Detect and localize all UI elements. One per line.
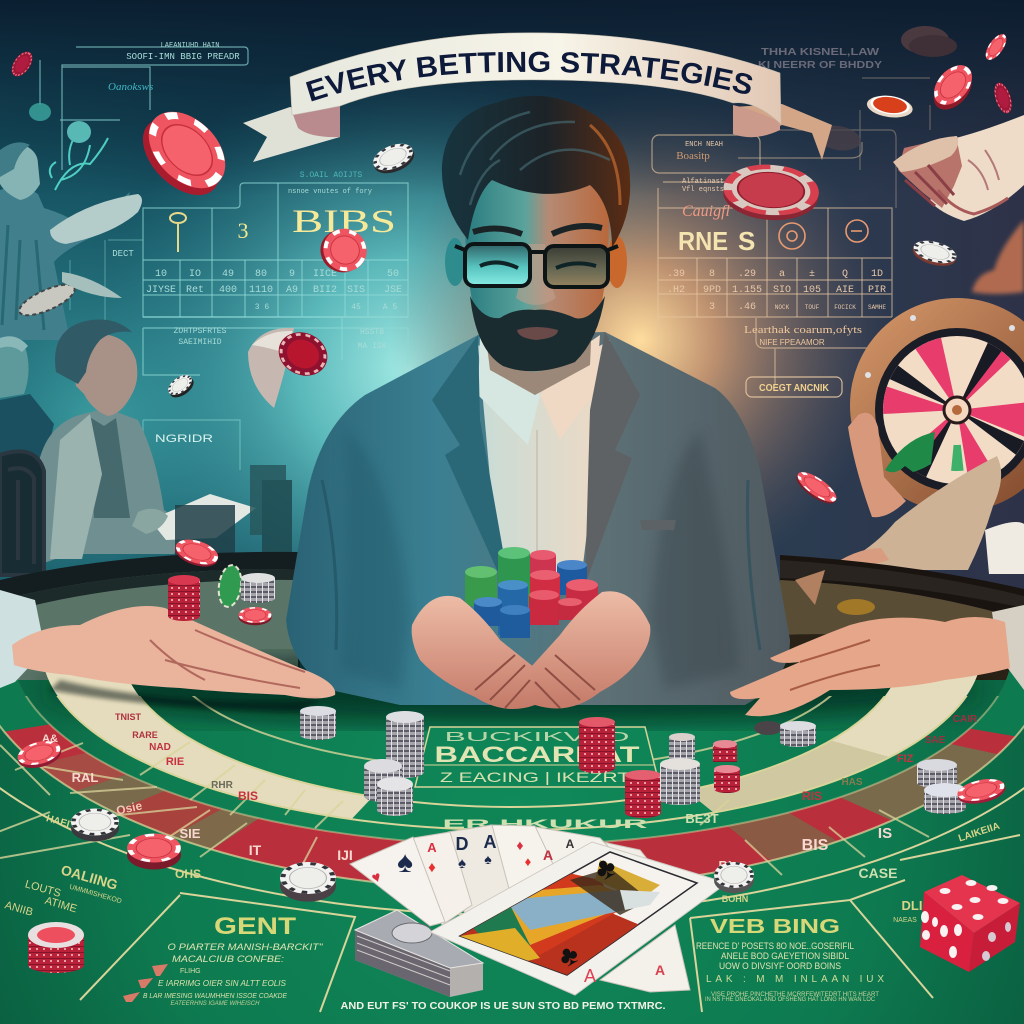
felt gold lines [0,696,1024,1012]
winged chip [248,324,335,408]
right chart text: THHA KISNEL,LAW [761,47,880,58]
card pips: ♠ [569,857,575,869]
right chart text: SAMHE [868,304,886,311]
icons in right chart [779,220,868,249]
left chart text [108,42,402,445]
left chart text: 1110 [249,285,273,296]
right chart text: .46 [738,302,756,313]
left chart text: JIYSE [146,285,176,296]
strategy panel: GENT: GENT [214,913,296,940]
strategy panel: VEB BING: ANELE BOD GAEYETION SIBIDL [721,951,849,961]
left chart text: LAEANIUHD HAIN [161,42,219,50]
right chart text: Alfatinast [682,178,724,186]
betting band labels: SIE [180,826,201,841]
card pips: A [543,847,553,863]
right chart text: NOCK [775,304,790,311]
card pips: ♦ [525,854,532,869]
right chart text: 8 [709,269,715,280]
betting band labels [42,712,1001,904]
right chart text: TOUF [805,304,820,311]
strategy panel: GENT: FLIHG [180,968,201,975]
icon: glowing key [170,213,186,252]
roulette wheel [850,298,1024,512]
left chart text: A 5 [383,303,397,312]
right chart text: Cauigfl [682,203,731,220]
left chart text: IO [189,269,201,280]
person lapels [432,332,676,590]
chips in person's hands [465,547,598,638]
person neck [485,320,592,395]
left chart text: NGRIDR [155,433,213,445]
betting band labels: IJI [337,847,353,863]
Baccarat center box [415,727,660,831]
betting band labels: RIS [802,789,822,803]
strategy panel: VEB BING: IN NS FHE DNEOKAL AND OFSHENG HAT LONG HN WAN LOC [705,997,876,1003]
betting band labels: RAL [72,770,98,785]
Baccarat center box: ER HKUKUR [442,817,648,831]
left chart text: Ret [186,285,204,296]
left chart text: ZOHTPSFRTES [174,327,227,336]
betting band labels: OHS [175,867,201,881]
king playing card [430,842,727,995]
rail and table surface left [0,552,300,700]
left old man [0,336,54,458]
person shirt [478,335,610,590]
small dark red chip top left [7,48,37,80]
left panel text side: LOUTS [24,878,62,900]
chips on right surface [795,570,875,615]
right chart text: ENCH NEAH [685,141,723,149]
right chart text: a [779,269,785,280]
right chart text [667,47,886,394]
red die [920,875,1020,972]
right chart text: SIO [773,285,791,296]
strategy panel: VEB BING: VISE PROHE PINCHETHE MCRRFEWITEDRT HITS HEART [711,992,879,998]
right chart text: 3 [709,302,715,313]
right chart text: KI NEERR OF BHDDY [758,60,882,71]
strategy panel: VEB BING [696,916,884,1003]
flying chip right of person [792,467,841,509]
right strategy chart panel [652,78,930,400]
left chart text: 9 [289,269,295,280]
left strategy chart panel [40,47,408,470]
left panel text side: UMMMISHEKOD [68,884,122,905]
right chart text: 1D [871,269,883,280]
left chart text: 50 [387,269,399,280]
right chart text: 1.155 [732,285,762,296]
left chart text: BII2 [313,285,337,296]
right chart text: Q [842,269,848,280]
strategy panel: GENT: EATEERHNS IGAME WIHEISCH [171,1001,260,1007]
strategy panel: VEB BING: VEB BING [710,916,840,938]
card pips: ♦ [516,837,524,853]
right chart text: PIR [868,285,886,296]
left panel text side: ATIME [43,895,78,915]
right dealer hand [730,605,1024,716]
person hair [442,96,630,248]
cream betting band [46,672,978,818]
left chart text: nsnoe vnutes of fory [288,188,372,196]
betting band labels: A& [42,733,58,745]
left chart text: DECT [112,249,134,259]
right chart text: .H2 [667,285,685,296]
right chart text: COEGT ANCNIK [759,383,830,394]
right reclining figure and green creature [825,413,1024,576]
betting band labels: BIS [802,837,829,854]
strategy panel: GENT: B LAR IMESING WAUMHHEN ISSOE COAKDE [143,993,287,1000]
flying white chip beside man [165,371,197,401]
bottom caption: AND EUT FS' TO COUKOP IS UE SUN STO BD PEMO TXTMRC. [340,1001,666,1012]
left panel text side [3,861,122,919]
betting band labels: BOHN [722,894,748,904]
felt table [0,656,1024,1024]
person cupped hands [412,591,650,709]
strategy panel: GENT: MACALCIUB CONFBE: [172,954,285,964]
left chart text: Oanoksws [108,81,153,93]
right chart text: NIFE FPEAAMOR [759,338,825,347]
strategy panel: GENT [123,913,323,1007]
side panel by the die: NAEAS [893,917,917,924]
betting band labels: IT [249,842,262,858]
betting band labels: RHR [211,780,234,791]
title text: EVERY BETTING STRATEGIES [306,52,752,102]
right chart text: FOCICK [834,304,856,311]
flying chip: big coral [129,97,240,209]
smoke cloud [972,220,1024,294]
strategy panel: GENT: O PIARTER MANISH-BARCKIT" [168,942,323,952]
deck of cards [355,910,483,997]
left chart text: S.OAIL AOIJTS [300,171,362,180]
card pips: A [655,962,665,978]
city silhouette [175,465,292,555]
betting band labels: BI [718,858,732,873]
betting band labels: BE3T [685,811,719,826]
chip over BIBS [312,219,375,282]
betting band labels: FIZ [897,753,914,765]
right chart text: RNE [678,226,728,256]
right chart text: 105 [803,285,821,296]
rail and table surface right [780,555,1024,715]
betting band labels: RARE [132,730,158,740]
betting band labels: BIS [238,789,258,803]
left dealer hand [0,590,335,712]
side panel by the die [893,898,922,924]
betting band labels: CAIR [953,714,978,725]
card pips: ♠ [458,855,466,872]
title banner [243,32,832,162]
card pips: ♠ [397,846,413,879]
betting band labels: IS [878,825,892,842]
left chart text: 3 6 [255,303,269,312]
strategy panel: VEB BING: UOW O DIVSIYF OORD BOINS [719,961,841,971]
left chart text: A9 [286,285,298,296]
left seated man [36,320,256,565]
ornate chair [0,451,44,575]
betting band labels: Osie [115,798,144,818]
card pips: A [427,840,437,855]
outer red betting band [0,670,1024,882]
king playing card: ♣ [588,849,622,888]
card fan [350,825,690,992]
king playing card: A [584,966,596,986]
right chart text: AIE [836,285,854,296]
left chart text: 3 [238,218,248,243]
card pips: A [566,837,575,851]
strategy panel: GENT: E IARRIMG OIER SIN ALTT EOLIS [158,979,287,988]
left chart text: 80 [255,269,267,280]
left chart text: HSSTB [360,328,384,337]
left chart text: BIBS [292,204,396,240]
background gradient [0,0,1024,700]
card pips: D [456,834,468,854]
chip on right chart [722,162,820,223]
side panel by the die: DLI [902,898,922,913]
card pips: ♠ [484,851,492,867]
right chart text: ± [809,269,815,280]
left chart text: 400 [219,285,237,296]
left panel text side: ANIIB [3,899,34,919]
left chart text: JSE [384,285,402,296]
person glasses [455,226,618,287]
Baccarat center box: BACCARRAT [434,742,640,767]
strategy panel: VEB BING: REENCE D' POSETS 8O NOE..GOSERIFIL [696,941,854,951]
betting band labels: SAE [925,735,946,746]
right chart text: 9PD [703,285,721,296]
betting band labels: HAS [841,777,863,788]
left chart text: SOOFI-IMN BBIG PREADR [126,52,240,62]
card pips: ♥ [369,868,384,887]
right chart text: S [738,226,755,256]
teal magic swirl [29,103,108,190]
left statue woman [0,142,142,340]
left chart text: SIS [347,285,365,296]
right flying chips [813,26,1015,270]
right chart text: Boasitp [676,150,710,162]
card pips [369,832,665,978]
betting band labels: NAD [149,742,171,753]
left chart text: 49 [222,269,234,280]
chips on left surface [168,535,275,625]
left panel text side: OALIING [59,861,120,893]
strategy panel: VEB BING: LAK : M M INLAAN IUX [706,974,884,985]
left chart text: SAEIMIHID [178,338,222,347]
Baccarat center box: Z EACING | IKEZRT [440,769,631,785]
left chart text: 10 [155,269,167,280]
upper right hand with chip stack [893,115,1024,221]
betting band labels: LAIKEIIA [957,821,1001,844]
right chart text: Learthak coarum,ofyts [744,325,862,336]
Baccarat center box: BUCKIKVED [444,729,630,744]
king playing card: ♣ [553,937,584,973]
right chart text: Vfl eqnsts [682,186,724,194]
right chart text: .29 [738,269,756,280]
left chart text: 45 [351,303,361,312]
betting band labels: RIE [166,756,184,768]
betting band labels: CASE [859,865,897,881]
card pips: ♦ [428,859,436,876]
left chart text: MA ISK [358,342,387,351]
betting band labels: HAEIT [45,813,77,832]
person head [445,160,627,372]
betting band labels: TNIST [115,712,142,722]
chip stacks on felt [15,706,1007,973]
right chart text: .39 [667,269,685,280]
left chart text: IICE [313,269,337,280]
person jacket [286,332,790,705]
card pips: A [484,832,496,852]
flying chip: white top [369,138,418,179]
